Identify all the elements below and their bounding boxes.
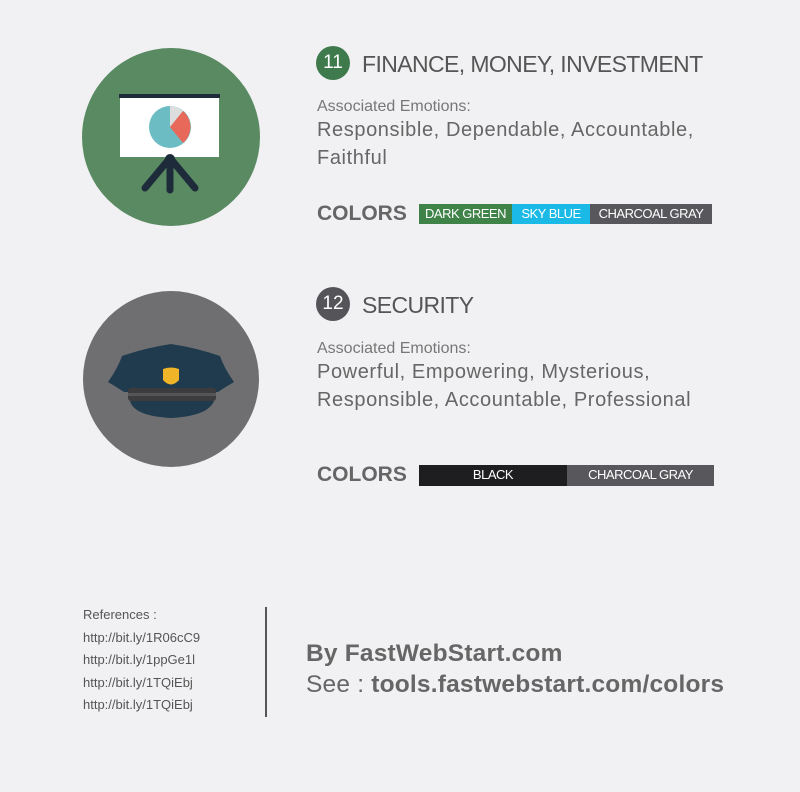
references: References :: [83, 607, 157, 622]
colors 11: COLORS: [317, 202, 407, 225]
heading 12: SECURITY: [362, 292, 474, 318]
emotions 11: Associated Emotions:: [317, 98, 471, 115]
colors 11: SKY BLUE: [521, 206, 581, 221]
emotions 12: Powerful, Empowering, Mysterious,: [317, 361, 650, 383]
colors 12: [317, 463, 714, 486]
references: [83, 607, 200, 712]
credit: [306, 640, 724, 698]
colors 11: [317, 202, 712, 225]
references: http://bit.ly/1TQiEbj: [83, 697, 193, 712]
credit: See : tools.fastwebstart.com/colors: [306, 671, 724, 698]
icon: presentation board: [82, 48, 260, 226]
references: http://bit.ly/1ppGe1l: [83, 652, 195, 667]
emotions 12: Associated Emotions:: [317, 340, 471, 357]
emotions 11: Faithful: [317, 147, 387, 169]
colors 11: DARK GREEN: [425, 206, 506, 221]
colors 12: COLORS: [317, 463, 407, 486]
colors 12: BLACK: [473, 467, 513, 482]
heading 11: 11: [323, 52, 343, 73]
heading 12: [316, 287, 474, 321]
heading 12: 12: [322, 293, 344, 314]
references: http://bit.ly/1TQiEbj: [83, 674, 193, 690]
emotions 11: [317, 98, 694, 169]
colors 12: CHARCOAL GRAY: [588, 467, 693, 482]
icon: police hat: [83, 291, 259, 467]
references: http://bit.ly/1R06cC9: [83, 630, 200, 644]
credit: By FastWebStart.com: [306, 640, 563, 667]
emotions 12: Responsible, Accountable, Professional: [317, 389, 691, 411]
colors 11: CHARCOAL GRAY: [599, 206, 703, 221]
emotions 12: [317, 340, 691, 411]
heading 11: [316, 46, 703, 80]
heading 11: FINANCE, MONEY, INVESTMENT: [362, 51, 703, 77]
emotions 11: Responsible, Dependable, Accountable,: [317, 119, 694, 141]
